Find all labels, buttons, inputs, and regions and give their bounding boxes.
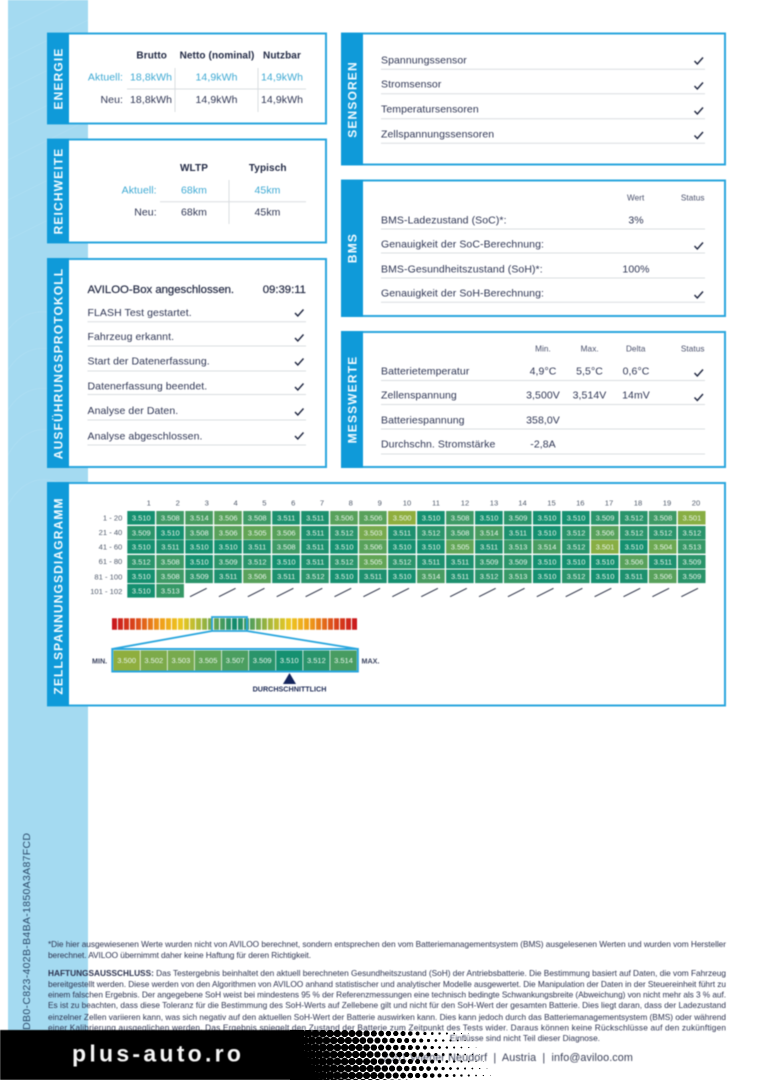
heatmap row 41-60: 3.504 (654, 542, 672, 552)
column numbers: 7 (320, 498, 324, 508)
table: Energie: Brutto (136, 50, 167, 62)
footnote (48, 939, 726, 960)
list: protocol steps: Analyse abgeschlossen. (88, 430, 202, 442)
heatmap row 21-40: 3.512 (422, 528, 440, 538)
legend scale: 3.502 (144, 656, 163, 665)
list: sensors (381, 54, 705, 143)
row labels: 1 - 20 (103, 514, 122, 522)
column numbers: 20 (692, 498, 700, 508)
heatmap row 81-100: 3.514 (422, 572, 440, 581)
heatmap row 1-20: 3.506 (335, 514, 354, 522)
disclaimer: einem falschen Ergebnis. Der angegebene SoH weist bei mindestens 95 % der Referenzmessungen eine technisch bedingte Schwankungsbreite (Abweichung) von nicht mehr als 3 % auf. (48, 990, 726, 1000)
heatmap row 21-40: 3.511 (306, 528, 324, 538)
heatmap row 1-20: 3.510 (480, 514, 498, 522)
heatmap row 21-40: 3.505 (248, 528, 267, 538)
heatmap row 81-100: 3.509 (683, 572, 701, 581)
column numbers: 8 (349, 498, 353, 508)
heatmap row 81-100: 3.511 (219, 572, 237, 581)
heatmap row 61-80: 3.512 (132, 558, 151, 566)
heatmap row 61-80: 3.510 (538, 558, 556, 566)
footnote: berechnet. AVILOO übernimmt daher keine Haftung für deren Richtigkeit. (48, 950, 311, 960)
heatmap row 61-80: 3.508 (161, 558, 180, 566)
heatmap row 61-80: 3.510 (567, 558, 585, 566)
heatmap row 41-60: 3.505 (451, 542, 469, 552)
heatmap row 21-40: 3.508 (451, 528, 469, 538)
table: Energie: 14,9kWh (261, 94, 303, 106)
column numbers: 13 (490, 498, 498, 508)
heatmap row 41-60: 3.510 (422, 542, 440, 552)
average marker (283, 673, 296, 684)
heatmap row 61-80: 3.512 (248, 558, 267, 566)
heatmap row 21-40: 3.506 (277, 528, 296, 538)
table: Energie: 14,9kWh (261, 72, 303, 84)
heatmap row 41-60: 3.508 (277, 542, 296, 552)
table: Energie: 18,8kWh (130, 94, 172, 106)
heatmap row 101-102: 3.510 (132, 586, 151, 596)
heatmap row 41-60: 3.510 (190, 542, 209, 552)
heatmap row 41-60: 3.501 (596, 542, 614, 552)
column numbers: 18 (634, 498, 642, 508)
list: protocol steps: Datenerfassung beendet. (88, 380, 207, 392)
heatmap row 21-40: 3.512 (625, 528, 643, 538)
list: protocol steps: Fahrzeug erkannt. (88, 331, 174, 343)
table: Messwerte: Max. (581, 344, 599, 354)
heatmap row 21-40: 3.508 (190, 528, 209, 538)
heatmap row 101-102: 3.513 (161, 586, 180, 596)
row labels: 101 - 102 (90, 587, 122, 596)
heatmap row 21-40: 3.514 (480, 528, 498, 538)
heatmap row 1-20: 3.511 (306, 514, 324, 522)
vertical report id: 4DB0-C823-402B-B4BA-1850A3A87FCD (21, 833, 33, 1036)
table: Messwerte: 358,0V (526, 414, 560, 426)
column numbers: 6 (291, 498, 295, 508)
column numbers: 4 (233, 498, 238, 508)
heatmap row 1-20: 3.509 (509, 514, 527, 522)
heatmap row 21-40: 3.512 (683, 528, 701, 538)
table: Messwerte: 3,500V (526, 390, 560, 402)
heatmap row 41-60: 3.511 (306, 542, 324, 552)
panel: Sensoren (341, 33, 725, 165)
legend scale: 3.507 (226, 656, 244, 665)
heatmap row 61-80: 3.510 (596, 558, 614, 566)
heatmap row 41-60: 3.511 (480, 542, 498, 552)
heatmap row 1-20: 3.508 (161, 514, 180, 522)
table: Reichweite: 68km (181, 206, 207, 218)
column numbers: 19 (663, 498, 671, 508)
row labels (90, 514, 122, 596)
column numbers: 17 (605, 498, 613, 508)
column numbers: 2 (176, 498, 180, 508)
list: protocol steps: Start der Datenerfassung. (88, 356, 210, 368)
heatmap row 81-100: 3.511 (277, 572, 295, 581)
table: Reichweite: 45km (254, 184, 281, 196)
heatmap row 61-80: 3.511 (654, 558, 672, 566)
table: Reichweite: Aktuell: (122, 184, 157, 196)
heatmap row 41-60: 3.513 (509, 542, 527, 552)
column numbers: 1 (147, 498, 151, 508)
legend scale: 3.505 (199, 656, 217, 665)
heading: Messwerte: MESSWERTE (346, 356, 360, 443)
heading: Energie: ENERGIE (52, 47, 66, 110)
heatmap row 1-20: 3.506 (219, 514, 238, 522)
brand text: plus-auto.ro (72, 1040, 241, 1066)
heatmap row 1-20: 3.512 (625, 514, 643, 522)
heatmap row 61-80: 3.506 (625, 558, 643, 566)
heatmap row 61-80: 3.511 (451, 558, 469, 566)
heatmap row 1-20: 3.509 (596, 514, 614, 522)
heatmap row 21-40: 3.510 (538, 528, 556, 538)
heatmap row 61-80: 3.509 (683, 558, 701, 566)
table: BMS: 100% (622, 264, 650, 276)
list: protocol steps: FLASH Test gestartet. (88, 307, 192, 319)
column numbers: 11 (432, 498, 440, 508)
table: Messwerte: Min. (535, 344, 551, 354)
black footer band (0, 1030, 302, 1080)
heatmap row 61-80: 3.509 (219, 558, 238, 566)
column numbers: 16 (576, 498, 585, 508)
column numbers: 14 (518, 498, 527, 508)
table: BMS: Status (681, 194, 705, 202)
table: Messwerte: Status (681, 344, 705, 354)
heatmap row 1-20: 3.510 (538, 514, 556, 522)
heatmap row 41-60: 3.510 (219, 542, 238, 552)
background stripe (8, 0, 88, 1080)
zoom connector (112, 617, 358, 649)
heatmap row 1-20: 3.514 (190, 514, 209, 522)
panel: BMS (341, 180, 725, 317)
heatmap row 21-40: 3.512 (567, 528, 585, 538)
heatmap row 81-100: 3.511 (625, 572, 643, 581)
heatmap row 1-20: 3.506 (364, 514, 382, 522)
heatmap row 81-100: 3.510 (596, 572, 614, 581)
heatmap row 21-40: 3.510 (161, 528, 180, 538)
list: sensors: Temperatursensoren (381, 104, 479, 116)
disclaimer: Es ist zu beachten, dass diese Toleranz für die Bestimmung des SoH-Werts auf Zellebene gilt und nicht für den SoH-Wert der gesamten Batterie. Dies liegt daran, dass der Ladezustand (48, 1000, 726, 1010)
heatmap row 61-80: 3.509 (480, 558, 498, 566)
disclaimer: einer Kalibrierung ausgeglichen werden. Das Ergebnis spiegelt den Zustand der Batterie zum Zeitpunkt des Tests wider. Daraus können keine Rückschlüsse auf den zukünftigen (48, 1022, 726, 1032)
table: Messwerte: Batterietemperatur (381, 366, 470, 378)
heading: Ausführungsprotokoll: AUSFÜHRUNGSPROTOKOLL (50, 268, 66, 459)
legend scale: 3.500 (117, 656, 136, 665)
heatmap row 41-60: 3.513 (683, 542, 701, 552)
panel: Energie (47, 33, 326, 124)
heatmap row 41-60: 3.510 (625, 542, 643, 552)
heading: Reichweite: REICHWEITE (52, 148, 66, 234)
legend scale: 3.512 (307, 656, 326, 665)
heatmap row 81-100: 3.513 (509, 572, 527, 581)
heatmap row 81-100: 3.506 (248, 572, 267, 581)
heatmap row 41-60: 3.510 (335, 542, 354, 552)
list: sensors: Stromsensor (381, 78, 442, 90)
column numbers: 15 (547, 498, 556, 508)
table: BMS: Wert (627, 194, 645, 202)
list: sensors: Zellspannungssensoren (381, 128, 494, 140)
table: Messwerte: 5,5°C (576, 366, 603, 378)
panel: Reichweite (47, 139, 326, 243)
heatmap row 1-20: 3.511 (277, 514, 295, 522)
table: Messwerte: 0,6°C (623, 366, 650, 378)
heatmap row 61-80: 3.511 (422, 558, 440, 566)
heatmap row 81-100: 3.512 (306, 572, 325, 581)
heading: Sensoren: SENSOREN (346, 61, 360, 138)
legend scale: 3.510 (280, 656, 299, 665)
row labels: 61 - 80 (99, 557, 122, 566)
heatmap row 81-100: 3.510 (335, 572, 354, 581)
header row: box connected (88, 284, 306, 296)
table: Reichweite: 68km (181, 184, 207, 196)
table: Reichweite: Neu: (134, 206, 157, 218)
table: Messwerte: 14mV (622, 390, 650, 402)
table: Messwerte: 3,514V (573, 390, 606, 402)
heatmap row 21-40: 3.506 (219, 528, 238, 538)
table: BMS: 3% (628, 214, 644, 226)
heatmap row 21-40: 3.511 (509, 528, 527, 538)
heatmap row 21-40: 3.511 (393, 528, 411, 538)
heatmap row 61-80: 3.512 (393, 558, 411, 566)
column numbers (147, 498, 700, 508)
halftone decoration (290, 1030, 530, 1080)
table: BMS: BMS-Gesundheitszustand (SoH)*: (381, 264, 543, 276)
heatmap row 1-20: 3.508 (248, 514, 267, 522)
heatmap row 41-60: 3.514 (538, 542, 556, 552)
row labels: 41 - 60 (99, 542, 122, 552)
heatmap row 1-20: 3.508 (654, 514, 672, 522)
heatmap row 81-100: 3.511 (364, 572, 382, 581)
table: Energie: 14,9kWh (196, 72, 238, 84)
legend scale: 3.503 (172, 656, 190, 665)
heatmap row 21-40: 3.506 (596, 528, 614, 538)
table: Messwerte: 4,9°C (530, 366, 557, 378)
table: Messwerte: Durchschn. Stromstärke (381, 438, 495, 450)
heatmap row 61-80: 3.505 (364, 558, 382, 566)
heatmap row 61-80: 3.511 (306, 558, 324, 566)
disclaimer: Einflüsse sind nicht Teil dieser Diagnose. (450, 1033, 600, 1043)
disclaimer: einzelner Zellen variieren kann, was sich negativ auf den aktuellen SoH-Wert der Batterie auswirken kann. Dies kann jedoch durch das Batteriemanagementsystem (BMS) oder während (48, 1012, 726, 1022)
table: Energie: Aktuell: (88, 72, 123, 84)
heatmap row 1-20: 3.510 (132, 514, 151, 522)
heatmap row 21-40: 3.512 (335, 528, 354, 538)
legend min label: MIN. (92, 656, 107, 666)
row labels: 81 - 100 (94, 572, 122, 582)
column numbers: 12 (461, 498, 469, 508)
heatmap row 41-60: 3.511 (161, 542, 179, 552)
panel: Messwerte (341, 331, 725, 468)
heatmap row 41-60: 3.511 (248, 542, 266, 552)
heatmap row 21-40: 3.509 (132, 528, 151, 538)
heatmap row 81-100: 3.508 (161, 572, 180, 581)
column numbers: 9 (378, 498, 382, 508)
heatmap row 81-100: 3.509 (190, 572, 209, 581)
row labels: 21 - 40 (99, 528, 122, 537)
heatmap row 41-60: 3.506 (364, 542, 382, 552)
list: protocol steps: Analyse der Daten. (88, 405, 178, 417)
heatmap row 81-100: 3.511 (451, 572, 469, 581)
footnote: *Die hier ausgewiesenen Werte wurden nicht von AVILOO berechnet, sondern entsprechen den vom Batteriemanagementsystem (BMS) ausgelesenen Werten und wurden vom Hersteller (48, 939, 726, 949)
list: protocol steps (88, 307, 306, 445)
disclaimer: HAFTUNGSAUSSCHLUSS: Das Testergebnis beinhaltet den aktuell berechneten Gesundheitszustand (SoH) der Antriebsbatterie. Die Bestimmung basiert auf Daten, die vom Fahrzeug (48, 968, 726, 978)
heatmap row 41-60 (127, 540, 706, 554)
empty cell slashes (190, 588, 698, 597)
table: BMS: BMS-Ladezustand (SoC)*: (381, 214, 507, 226)
heatmap row 81-100: 3.506 (654, 572, 672, 581)
table: Messwerte: Batteriespannung (381, 414, 465, 426)
table: Messwerte: Delta (626, 344, 646, 354)
table: Reichweite (122, 163, 306, 224)
table: BMS (381, 194, 705, 302)
heatmap row 81-100: 3.510 (393, 572, 411, 581)
panel: Ausführungsprotokoll (47, 258, 326, 468)
heatmap row 61-80: 3.510 (190, 558, 209, 566)
table: Messwerte (381, 344, 705, 454)
heatmap row 21-40: 3.503 (364, 528, 382, 538)
legend scale (112, 649, 358, 672)
heatmap row 81-100: 3.510 (132, 572, 151, 581)
table: Energie: 14,9kWh (196, 94, 238, 106)
header row: box connected: AVILOO-Box angeschlossen. (88, 284, 234, 296)
heatmap row 61-80 (127, 555, 706, 569)
heatmap row 61-80: 3.512 (335, 558, 354, 566)
heatmap row 1-20: 3.500 (393, 514, 411, 522)
heatmap row 21-40 (127, 526, 706, 540)
table: Energie (88, 50, 306, 112)
header row: box connected: 09:39:11 (263, 284, 306, 296)
heatmap row 81-100: 3.510 (538, 572, 556, 581)
heatmap row 1-20: 3.501 (683, 514, 701, 522)
heading: BMS: BMS (346, 233, 360, 263)
heatmap row 61-80: 3.509 (509, 558, 527, 566)
heatmap row 81-100: 3.512 (567, 572, 585, 581)
table: Energie: Netto (nominal) (180, 50, 254, 62)
column numbers: 5 (262, 498, 267, 508)
table: Reichweite: Typisch (249, 163, 287, 174)
heatmap row 41-60: 3.510 (132, 542, 151, 552)
list: sensors: Spannungssensor (381, 54, 467, 66)
gradient scale bar (112, 618, 358, 630)
table: Energie: 18,8kWh (130, 72, 172, 84)
table: Messwerte: -2,8A (530, 438, 556, 450)
table: Energie: Neu: (100, 94, 123, 106)
table: BMS: Genauigkeit der SoC-Berechnung: (381, 238, 544, 250)
column numbers: 10 (403, 498, 411, 508)
average label: DURCHSCHNITTLICH (253, 684, 326, 694)
heatmap row 1-20: 3.508 (451, 514, 469, 522)
heatmap row 81-100: 3.512 (480, 572, 498, 581)
heatmap row 1-20: 3.510 (422, 514, 440, 522)
column numbers: 3 (205, 498, 209, 508)
disclaimer: bereitgestellt werden. Diese werden von den Algorithmen von AVILOO anhand statistischer und analytischer Modelle ausgewertet. Die Manipulation der Daten in der Steuereinheit führt zu (48, 979, 726, 989)
heatmap row 41-60: 3.512 (567, 542, 585, 552)
heatmap row 61-80: 3.510 (277, 558, 296, 566)
heatmap row 101-102 (127, 584, 184, 598)
heatmap row 1-20 (127, 511, 706, 525)
heatmap row 21-40: 3.512 (654, 528, 672, 538)
legend scale: 3.509 (253, 656, 272, 665)
contact line: 2351 Wiener Neudorf | Austria | info@aviloo.com (383, 1052, 633, 1064)
legend scale: 3.514 (334, 656, 353, 665)
heading: Zellspannungsdiagramm: ZELLSPANNUNGSDIAGRAMM (52, 497, 66, 695)
table: Energie: Nutzbar (263, 50, 301, 62)
table: BMS: Genauigkeit der SoH-Berechnung: (381, 288, 544, 300)
table: Messwerte: Zellenspannung (381, 390, 457, 402)
table: Reichweite: WLTP (180, 163, 208, 174)
panel: Zellspannungsdiagramm (47, 482, 725, 706)
heatmap row 41-60: 3.510 (393, 542, 411, 552)
disclaimer (48, 968, 726, 1043)
table: Reichweite: 45km (254, 206, 281, 218)
legend max label: MAX. (362, 656, 379, 666)
heatmap row 1-20: 3.510 (567, 514, 585, 522)
heatmap row 81-100 (127, 570, 706, 583)
